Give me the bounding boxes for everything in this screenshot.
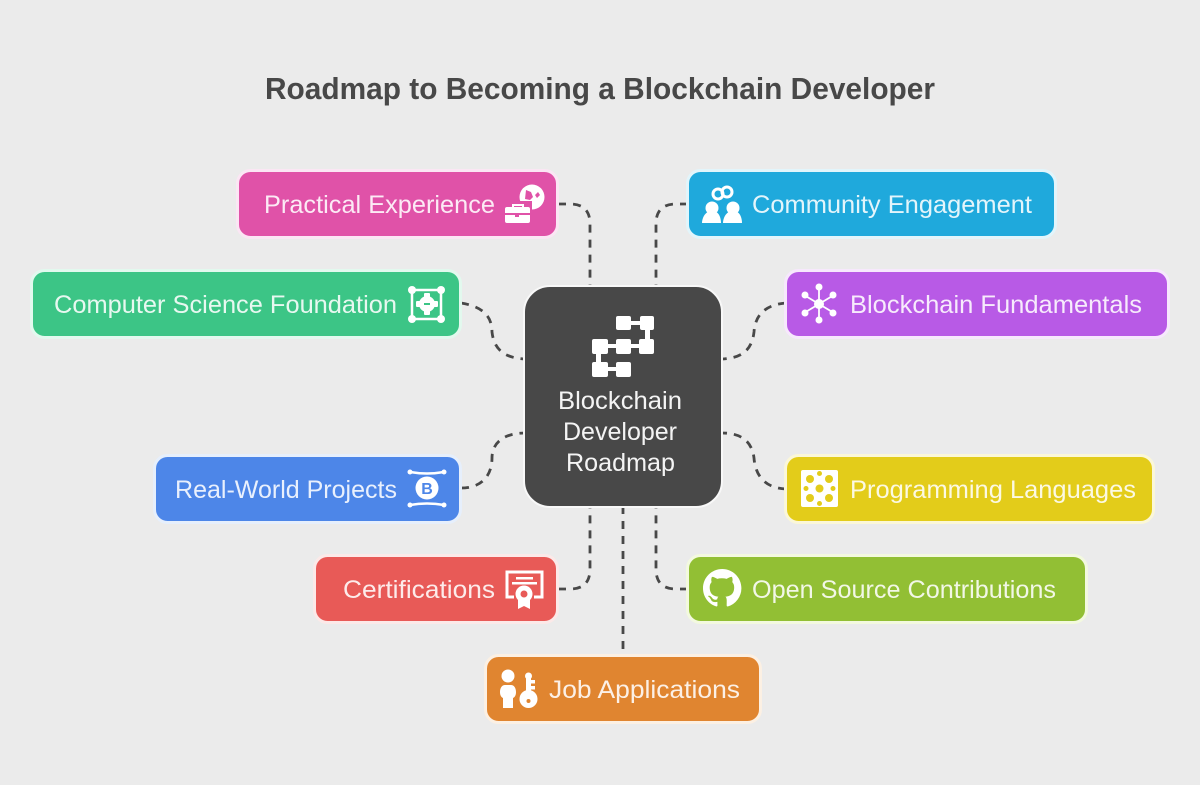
panel: programming languages [786, 456, 1154, 522]
connector: community engagement to center [656, 204, 688, 286]
panel: community engagement [688, 170, 1056, 238]
icon: person and key [500, 670, 538, 708]
label: Job Applications [549, 676, 740, 704]
title: Roadmap to Becoming a Blockchain Developer [265, 71, 935, 106]
icon: briefcase and globe [503, 184, 544, 225]
central label: Developer [563, 418, 677, 446]
central label: Blockchain [558, 387, 682, 415]
icon: two people and a link [702, 187, 742, 223]
panel: practical experience [238, 170, 558, 238]
panel: blockchain fundamentals [786, 270, 1168, 338]
connector: programming languages to center [722, 433, 786, 489]
label: Open Source Contributions [752, 576, 1056, 604]
panel: central node [524, 286, 722, 507]
panel: job applications [486, 656, 760, 722]
icon: certificate with ribbon [507, 572, 542, 609]
icon: bitcoin coin between lines [408, 470, 446, 508]
connector: certifications to center [558, 506, 590, 589]
icon: lattice grid [801, 470, 838, 507]
label: Computer Science Foundation [54, 291, 397, 319]
connector: computer science foundation to center [461, 303, 525, 359]
label: Practical Experience [264, 191, 495, 219]
connector: job applications to center [622, 506, 624, 656]
connector: blockchain fundamentals to center [722, 303, 786, 359]
icon: blockchain blocks [592, 316, 654, 377]
panel: open source contributions [688, 556, 1086, 622]
panel: certifications [314, 556, 558, 622]
label: Programming Languages [850, 476, 1136, 504]
icon: github mark [703, 569, 741, 606]
connector: open source contributions to center [656, 506, 688, 589]
icon: network of nodes [802, 284, 836, 324]
label: Blockchain Fundamentals [850, 291, 1142, 319]
label: Certifications [343, 576, 495, 604]
icon: chip in a frame [408, 286, 445, 323]
connector: real-world projects to center [461, 433, 525, 488]
panel: real-world projects [154, 456, 460, 522]
central label [558, 387, 682, 477]
label: Community Engagement [752, 191, 1032, 219]
icon: bitcoin coin between lines: B [421, 481, 433, 498]
central label: Roadmap [566, 449, 675, 477]
connector: practical experience to center [558, 204, 590, 286]
panel: computer science foundation [32, 270, 460, 338]
label: Real-World Projects [175, 476, 397, 504]
